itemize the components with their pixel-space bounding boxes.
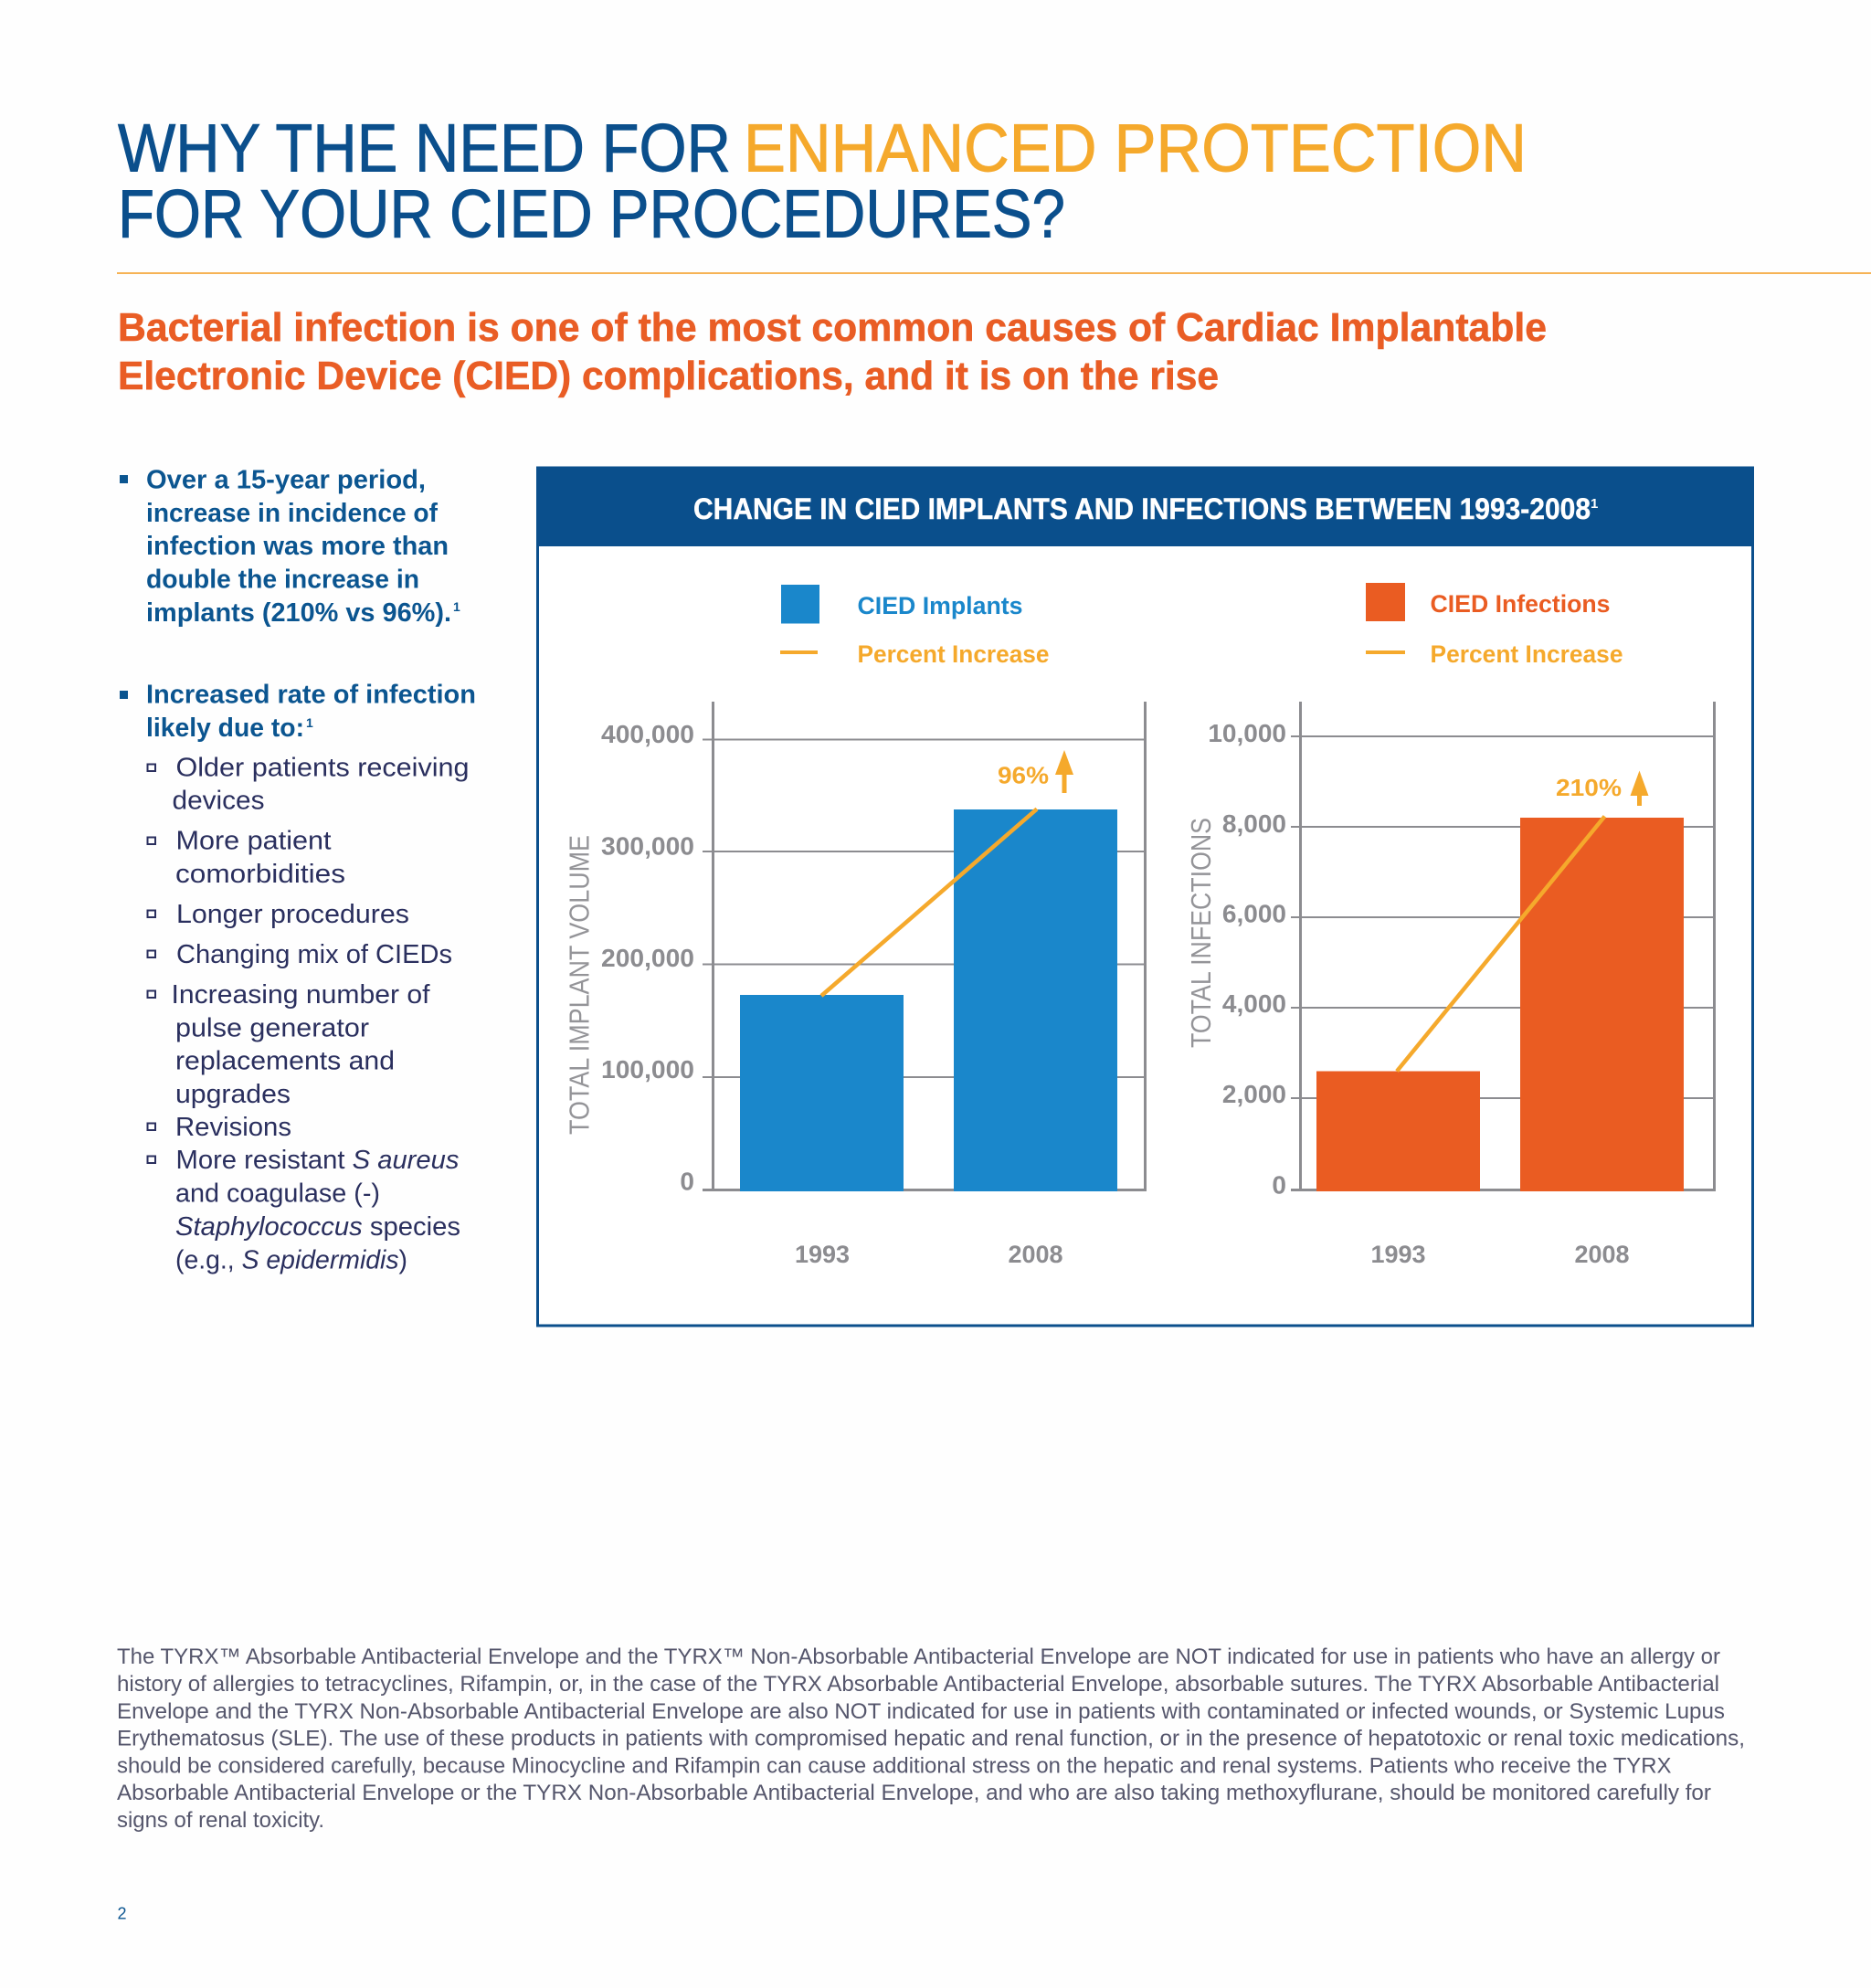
- y-axis labels: 10,000: [1208, 719, 1286, 747]
- bar: 2008 infections: [1520, 818, 1684, 1191]
- legend: implants: CIED Implants: [857, 592, 1023, 619]
- safety statement: [117, 1644, 1745, 1833]
- sub-list: likely causes: Increasing number of: [172, 980, 430, 1010]
- y-axis labels: 400,000: [601, 720, 694, 748]
- bullet: incidence of infection: Over a 15-year period,: [146, 466, 426, 495]
- bullet: incidence of infection: [120, 466, 460, 628]
- x-axis labels: [795, 1241, 1063, 1268]
- bullet: incidence of infection: 1: [453, 599, 460, 614]
- bullet: incidence of infection: infection was more than: [146, 532, 449, 561]
- safety statement: should be considered carefully, because Minocycline and Rifampin can cause additional stress on the hepatic and renal systems. Patients who receive the TYRX: [117, 1754, 1672, 1778]
- sub-list: likely causes: Longer procedures: [176, 900, 409, 929]
- sub-list: likely causes: replacements and: [175, 1047, 395, 1076]
- sub-list: likely causes: Changing mix of CIEDs: [176, 940, 452, 969]
- panel header: CHANGE IN CIED IMPLANTS AND INFECTIONS BETWEEN 1993-2008: [693, 492, 1591, 525]
- bullet: increased rate of infection: 1: [306, 715, 313, 730]
- sub-list: likely causes: [148, 753, 470, 1275]
- page number: 2: [117, 1904, 127, 1922]
- panel: change in CIED implants and infections: [536, 467, 1754, 1326]
- safety statement: history of allergies to tetracyclines, Rifampin, or, in the case of the TYRX Absorbable Antibacterial Envelope, absorbable sutures. The TYRX Absorbable Antibacterial: [117, 1672, 1719, 1697]
- y-axis title: TOTAL INFECTIONS: [1185, 818, 1217, 1048]
- sub-list: likely causes: More patient: [175, 826, 331, 855]
- callout: 210% increase: [1556, 771, 1648, 806]
- title: WHY THE NEED FOR: [118, 110, 731, 186]
- sub-list: likely causes: and coagulase (-): [175, 1179, 380, 1208]
- bullet: incidence of infection: increase in incidence of: [146, 499, 438, 528]
- sub-list: likely causes: Older patients receiving: [175, 753, 470, 782]
- bullet: increased rate of infection: Increased rate of infection: [146, 680, 476, 709]
- y-axis labels: 200,000: [601, 944, 694, 972]
- panel header: [536, 467, 1754, 546]
- panel header: 1: [1591, 496, 1598, 512]
- y-axis title: TOTAL IMPLANT VOLUME: [563, 835, 596, 1135]
- callout: 210% increase: 210%: [1556, 774, 1622, 801]
- sub-list: likely causes: Revisions: [175, 1113, 291, 1142]
- grid and axes: [1291, 702, 1716, 1191]
- callout: 96% increase: 96%: [998, 762, 1049, 789]
- bar: 2008 implants: [954, 809, 1117, 1191]
- legend: infections: Percent Increase: [1431, 640, 1623, 668]
- percent increase line: [1397, 817, 1604, 1071]
- safety statement: Erythematosus (SLE). The use of these products in patients with compromised hepatic and renal function, or in the presence of hepatotoxic or renal toxic medications,: [117, 1727, 1745, 1750]
- y-axis labels: 6,000: [1222, 899, 1286, 928]
- bullet: incidence of infection: implants (210% vs 96%).: [146, 598, 451, 628]
- bar chart: infections: [1185, 702, 1716, 1268]
- y-axis labels: 8,000: [1222, 809, 1286, 838]
- sub-list: likely causes: Staphylococcus species: [175, 1212, 460, 1242]
- legend: infections: [1366, 583, 1623, 668]
- x-axis labels: 2008: [1008, 1241, 1063, 1268]
- x-axis labels: 1993: [1370, 1241, 1426, 1268]
- bar: 1993 infections: [1316, 1071, 1480, 1191]
- title: [118, 110, 1527, 252]
- subtitle: Bacterial infection is one of the most common causes of Cardiac Implantable: [118, 305, 1547, 350]
- bullet: increased rate of infection: [120, 680, 476, 743]
- safety statement: The TYRX™ Absorbable Antibacterial Envelope and the TYRX™ Non-Absorbable Antibacterial Envelope are NOT indicated for use in patients who have an allergy or: [117, 1644, 1720, 1669]
- safety statement: Envelope and the TYRX Non-Absorbable Antibacterial Envelope are also NOT indicated for use in patients with contaminated or infected wounds, or Systemic Lupus: [117, 1699, 1725, 1724]
- bullet: incidence of infection: double the increase in: [146, 565, 419, 594]
- title: FOR YOUR CIED PROCEDURES?: [118, 175, 1065, 252]
- bar: 1993 implants: [740, 995, 904, 1191]
- sub-list: likely causes: (e.g., S epidermidis): [175, 1246, 407, 1275]
- bullet: increased rate of infection: likely due to:: [146, 714, 304, 743]
- y-axis labels: 2,000: [1222, 1080, 1286, 1108]
- x-axis labels: 1993: [795, 1241, 850, 1268]
- legend: implants: [780, 585, 1049, 668]
- safety statement: Absorbable Antibacterial Envelope or the TYRX Non-Absorbable Antibacterial Envelope, and who are also taking methoxyflurane, should be monitored carefully for: [117, 1781, 1711, 1805]
- y-axis labels: 100,000: [601, 1055, 694, 1084]
- callout: 96% increase: [998, 750, 1073, 793]
- y-axis labels: 300,000: [601, 831, 694, 861]
- grid and axes: [703, 702, 1147, 1191]
- safety statement: signs of renal toxicity.: [117, 1808, 324, 1833]
- title: ENHANCED PROTECTION: [744, 110, 1527, 186]
- legend: implants: Percent Increase: [857, 640, 1049, 668]
- subtitle: Electronic Device (CIED) complications, and it is on the rise: [118, 354, 1219, 398]
- bar chart: implant volume: [563, 702, 1147, 1268]
- x-axis labels: [1370, 1241, 1630, 1268]
- bullet list: key findings: [120, 466, 476, 1275]
- y-axis labels: [601, 720, 694, 1195]
- y-axis labels: 0: [1272, 1171, 1286, 1199]
- sub-list: likely causes: pulse generator: [175, 1014, 369, 1043]
- sub-list: likely causes: comorbidities: [175, 860, 345, 889]
- y-axis labels: 4,000: [1222, 989, 1286, 1018]
- x-axis labels: 2008: [1574, 1241, 1630, 1268]
- subtitle: [118, 305, 1547, 398]
- sub-list: likely causes: More resistant S aureus: [175, 1146, 459, 1175]
- y-axis labels: 0: [680, 1168, 694, 1195]
- sub-list: likely causes: upgrades: [175, 1080, 291, 1109]
- percent increase line: [821, 809, 1037, 996]
- sub-list: likely causes: devices: [172, 786, 265, 815]
- y-axis labels: [1208, 719, 1286, 1199]
- legend: infections: CIED Infections: [1431, 590, 1610, 618]
